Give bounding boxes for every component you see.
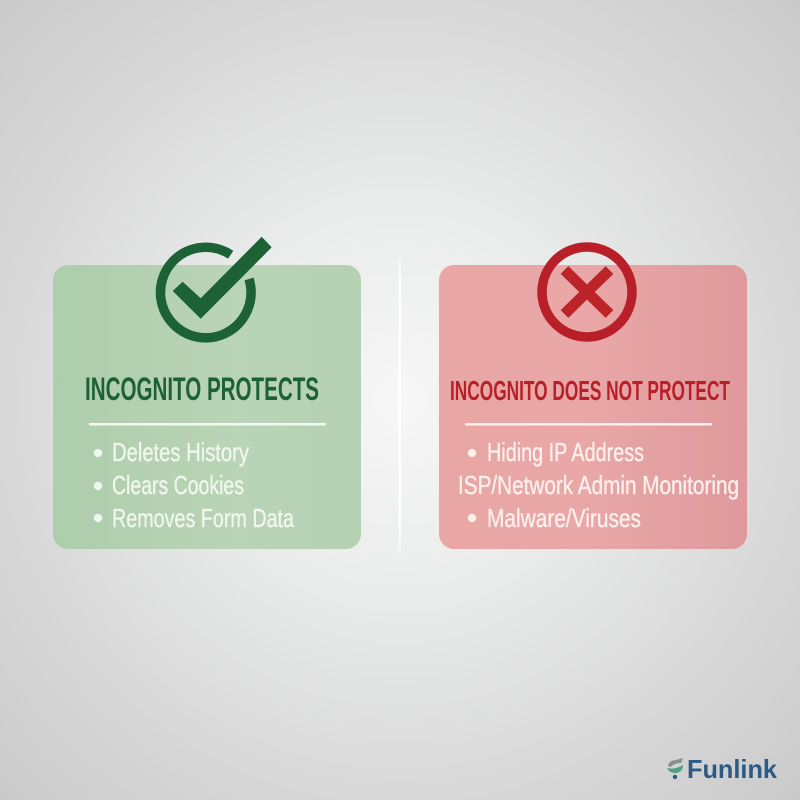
panel: incognito does not protect — [439, 247, 747, 549]
list: unprotected items: Hiding IP Address — [487, 437, 644, 467]
icon: red cross in circle — [542, 247, 632, 337]
list: protected items: Removes Form Data — [112, 503, 294, 533]
panel: incognito protects — [53, 237, 361, 549]
list: protected items: Clears Cookies — [112, 470, 244, 500]
red panel background — [439, 265, 747, 549]
icon: Funlink mark — [667, 758, 683, 779]
list: unprotected items: Malware/Viruses — [487, 503, 641, 533]
list: unprotected items — [458, 437, 739, 533]
list: protected items — [94, 437, 294, 533]
list: protected items: Deletes History — [112, 437, 249, 467]
green panel background — [53, 265, 361, 549]
icon: green check mark in circle — [160, 237, 272, 338]
logo wordmark: Funlink — [687, 754, 778, 784]
heading: incognito protects: INCOGNITO PROTECTS — [85, 371, 319, 407]
logo: Funlink — [667, 754, 778, 784]
